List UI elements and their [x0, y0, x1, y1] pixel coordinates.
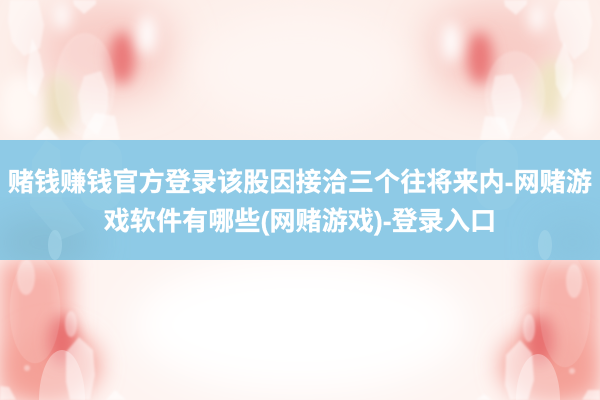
- title text: [8, 167, 592, 236]
- panel: top background: [0, 0, 600, 140]
- decorative hexagon highlights: [8, 0, 592, 140]
- panel: bottom background: [0, 253, 600, 400]
- title text: 赌钱赚钱官方登录该股因接洽三个往将来内-网赌游: [8, 167, 592, 197]
- title text: 戏软件有哪些(网赌游戏)-登录入口: [104, 206, 496, 236]
- panel: blue title band: [0, 140, 600, 260]
